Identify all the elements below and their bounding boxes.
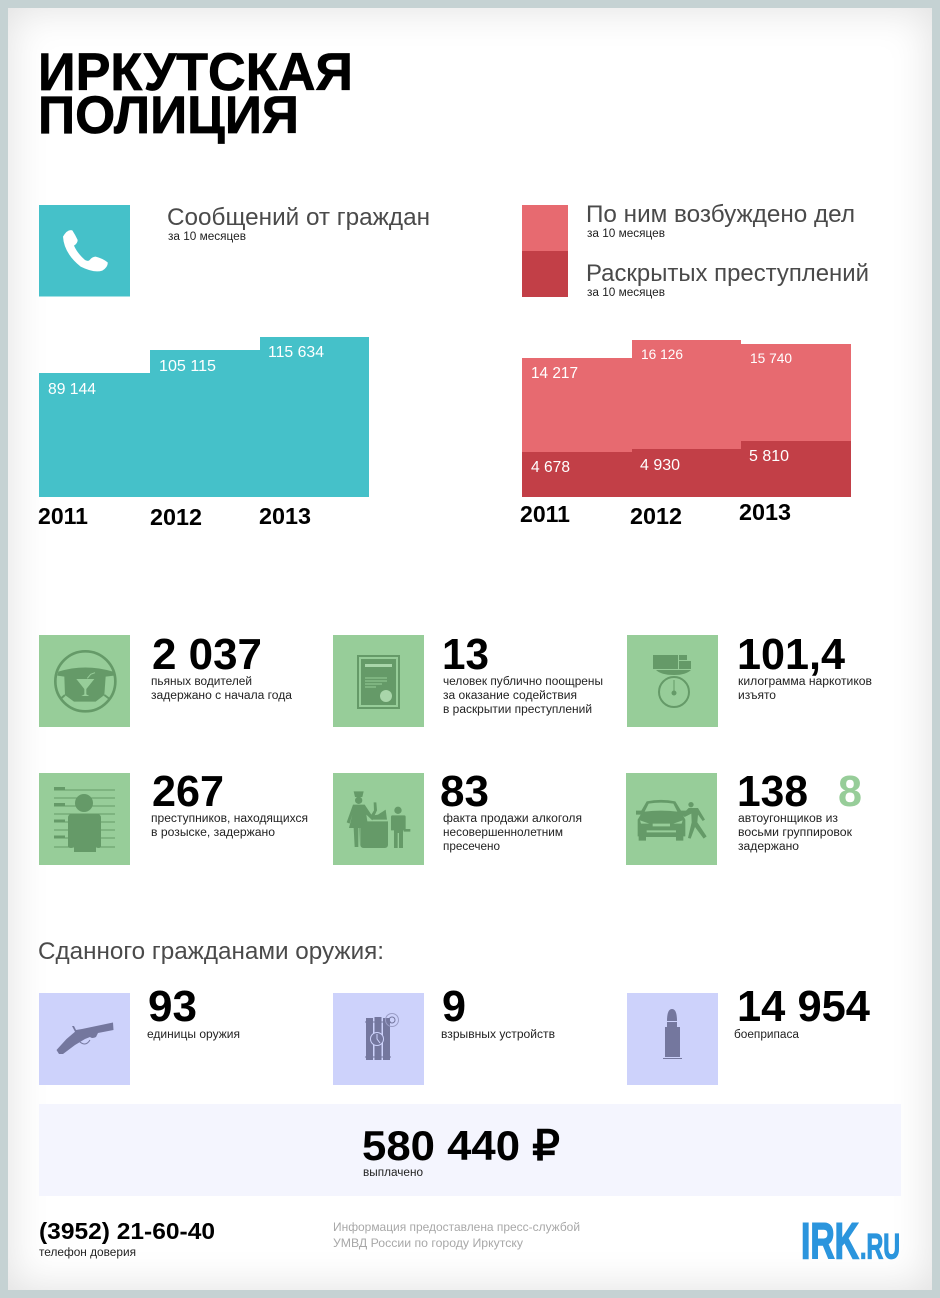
stat: explosive devices: [333, 983, 555, 1085]
stat: wanted criminals: в розыске, задержано: [151, 827, 275, 839]
stat: drugs seized: килограмма наркотиков: [738, 676, 872, 688]
helpline: [39, 1218, 215, 1259]
stat: rewarded citizens: 13: [442, 631, 489, 679]
helpline: телефон доверия: [39, 1247, 136, 1259]
stat: alcohol sales to minors: [333, 768, 582, 865]
source note: Информация предоставлена пресс-службой: [333, 1220, 580, 1234]
title: ИРКУТСКАЯ: [38, 43, 353, 102]
helpline: (3952) 21-60-40: [39, 1218, 215, 1244]
source note: [333, 1220, 580, 1250]
stat: wanted criminals: 267: [152, 768, 224, 816]
stat: car thieves: 8: [838, 768, 862, 816]
logo: .RU: [860, 1228, 900, 1266]
heading: surrendered weapons: Сданного гражданами оружия:: [38, 938, 384, 965]
payout band: [39, 1104, 901, 1196]
stat: alcohol sales to minors: несовершеннолетним: [443, 827, 563, 839]
stat: explosive devices: 9: [442, 983, 466, 1031]
stat: ammunition: [627, 983, 870, 1085]
stat: ammunition: боеприпаса: [734, 1029, 800, 1041]
stat: car thieves: [626, 768, 862, 865]
stat: wanted criminals: преступников, находящихся: [151, 813, 308, 825]
stat: drugs seized: [627, 631, 872, 727]
icon: phone: [39, 205, 130, 296]
stat: alcohol sales to minors: 83: [440, 768, 489, 816]
stat: car thieves: 138: [737, 768, 808, 816]
heading: citizen reports: за 10 месяцев: [168, 231, 246, 243]
heading: citizen reports: [167, 204, 430, 243]
chart: citizen reports by year: 2012: [150, 504, 202, 530]
legend: cases and solved crimes: Раскрытых преступлений: [586, 260, 869, 287]
chart: cases and solved crimes by year: 2012: [630, 503, 682, 529]
stat: rewarded citizens: за оказание содействия: [443, 690, 577, 702]
stat: car thieves: автоугонщиков из: [738, 813, 838, 825]
stat: firearms: единицы оружия: [147, 1029, 240, 1041]
stat: rewarded citizens: [333, 631, 603, 727]
stat: drugs seized: изъято: [738, 690, 776, 702]
stat: rewarded citizens: в раскрытии преступлений: [443, 704, 592, 716]
chart: cases and solved crimes by year: 4 930: [640, 457, 680, 474]
stat: drunk drivers: [39, 631, 293, 727]
stat: drugs seized: 101,4: [737, 631, 845, 679]
legend: cases and solved crimes: [522, 201, 869, 299]
chart: citizen reports by year: 2013: [259, 503, 311, 529]
legend: cases and solved crimes: за 10 месяцев: [587, 287, 665, 299]
stat: firearms: 93: [148, 983, 197, 1031]
payout band: 580 440 ₽: [362, 1122, 560, 1169]
legend: cases and solved crimes: По ним возбуждено дел: [586, 201, 855, 228]
chart: cases and solved crimes by year: 15 740: [750, 350, 792, 366]
stat: ammunition: 14 954: [737, 983, 870, 1031]
chart: cases and solved crimes by year: 2011: [520, 501, 570, 527]
stat: explosive devices: взрывных устройств: [441, 1029, 555, 1041]
logo: IRK: [801, 1212, 859, 1270]
stat: car thieves: восьми группировок: [738, 827, 853, 839]
stat: rewarded citizens: человек публично поощрены: [443, 676, 603, 688]
chart: citizen reports by year: 105 115: [159, 358, 216, 375]
legend: cases and solved crimes: за 10 месяцев: [587, 228, 665, 240]
payout band: выплачено: [363, 1167, 423, 1179]
chart: citizen reports by year: 2011: [38, 503, 88, 529]
chart: cases and solved crimes by year: 16 126: [641, 346, 683, 362]
title: [38, 43, 353, 145]
chart: cases and solved crimes by year: [520, 340, 851, 529]
stat: firearms: [39, 983, 240, 1085]
stat: car thieves: задержано: [738, 841, 799, 853]
chart: citizen reports by year: [38, 337, 369, 530]
chart: citizen reports by year: 115 634: [268, 344, 324, 361]
stat: drunk drivers: задержано с начала года: [151, 690, 293, 702]
chart: cases and solved crimes by year: 2013: [739, 499, 791, 525]
source note: УМВД России по городу Иркутску: [333, 1236, 523, 1250]
title: ПОЛИЦИЯ: [38, 86, 299, 145]
chart: citizen reports by year: 89 144: [48, 381, 96, 398]
stat: alcohol sales to minors: пресечено: [443, 841, 500, 853]
chart: cases and solved crimes by year: 4 678: [531, 459, 570, 476]
chart: cases and solved crimes by year: 14 217: [531, 365, 578, 382]
stat: wanted criminals: [39, 768, 308, 865]
stat: alcohol sales to minors: факта продажи алкоголя: [443, 813, 582, 825]
chart: cases and solved crimes by year: 5 810: [749, 448, 789, 465]
stat: drunk drivers: 2 037: [152, 631, 262, 679]
stat: drunk drivers: пьяных водителей: [151, 676, 252, 688]
heading: citizen reports: Сообщений от граждан: [167, 204, 430, 231]
